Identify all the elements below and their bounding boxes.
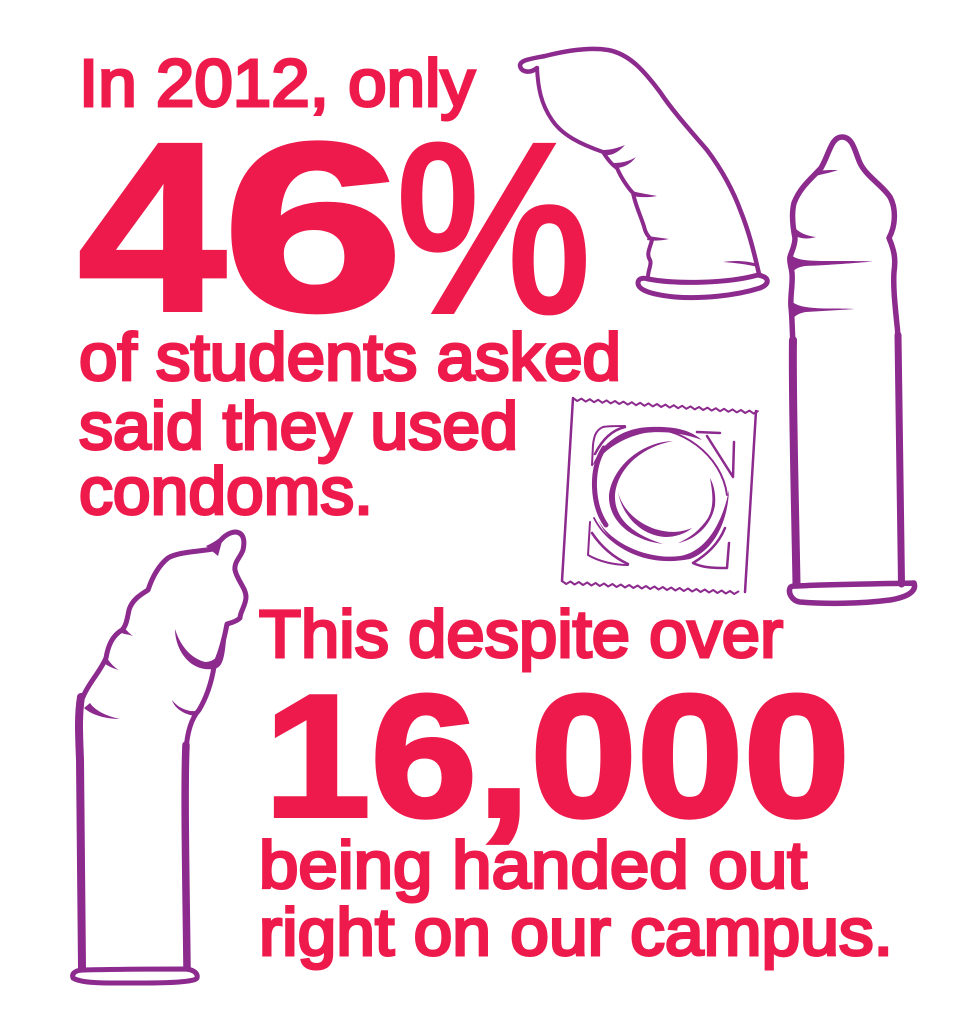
icon: textured condom, bottom left (73, 532, 246, 983)
outer ring (592, 427, 729, 561)
closing description: being handed out (259, 828, 807, 903)
top zigzag seal (573, 398, 758, 414)
left packet edge (562, 398, 573, 581)
icon: bent condom, top centre (520, 49, 767, 298)
statistic description: condoms. (79, 454, 373, 529)
icon: wrapped condom packet (562, 398, 758, 594)
text block: 16,000 statistic (259, 597, 893, 970)
lead-in line: This despite over (259, 597, 783, 672)
big number: 46%: 4 (78, 93, 226, 361)
right packet edge (745, 411, 756, 592)
statistic description: of students asked (79, 320, 621, 395)
inner ring (609, 441, 715, 544)
closing description: right on our campus. (259, 895, 893, 970)
closing description (259, 828, 893, 970)
big number: 46% (78, 93, 591, 362)
icon: upright condom, right (789, 137, 915, 603)
statistic description: said they used (79, 389, 518, 464)
intro line: In 2012, only (79, 46, 476, 121)
big number: 16,000: 16,000 (264, 658, 850, 853)
big number: 46%: % (396, 94, 591, 362)
bottom zigzag seal (562, 581, 738, 594)
statistic description (79, 320, 621, 529)
corner folds (588, 426, 734, 568)
text block: 46 percent statistic (78, 46, 621, 529)
big number: 46%: 6 (222, 93, 404, 361)
